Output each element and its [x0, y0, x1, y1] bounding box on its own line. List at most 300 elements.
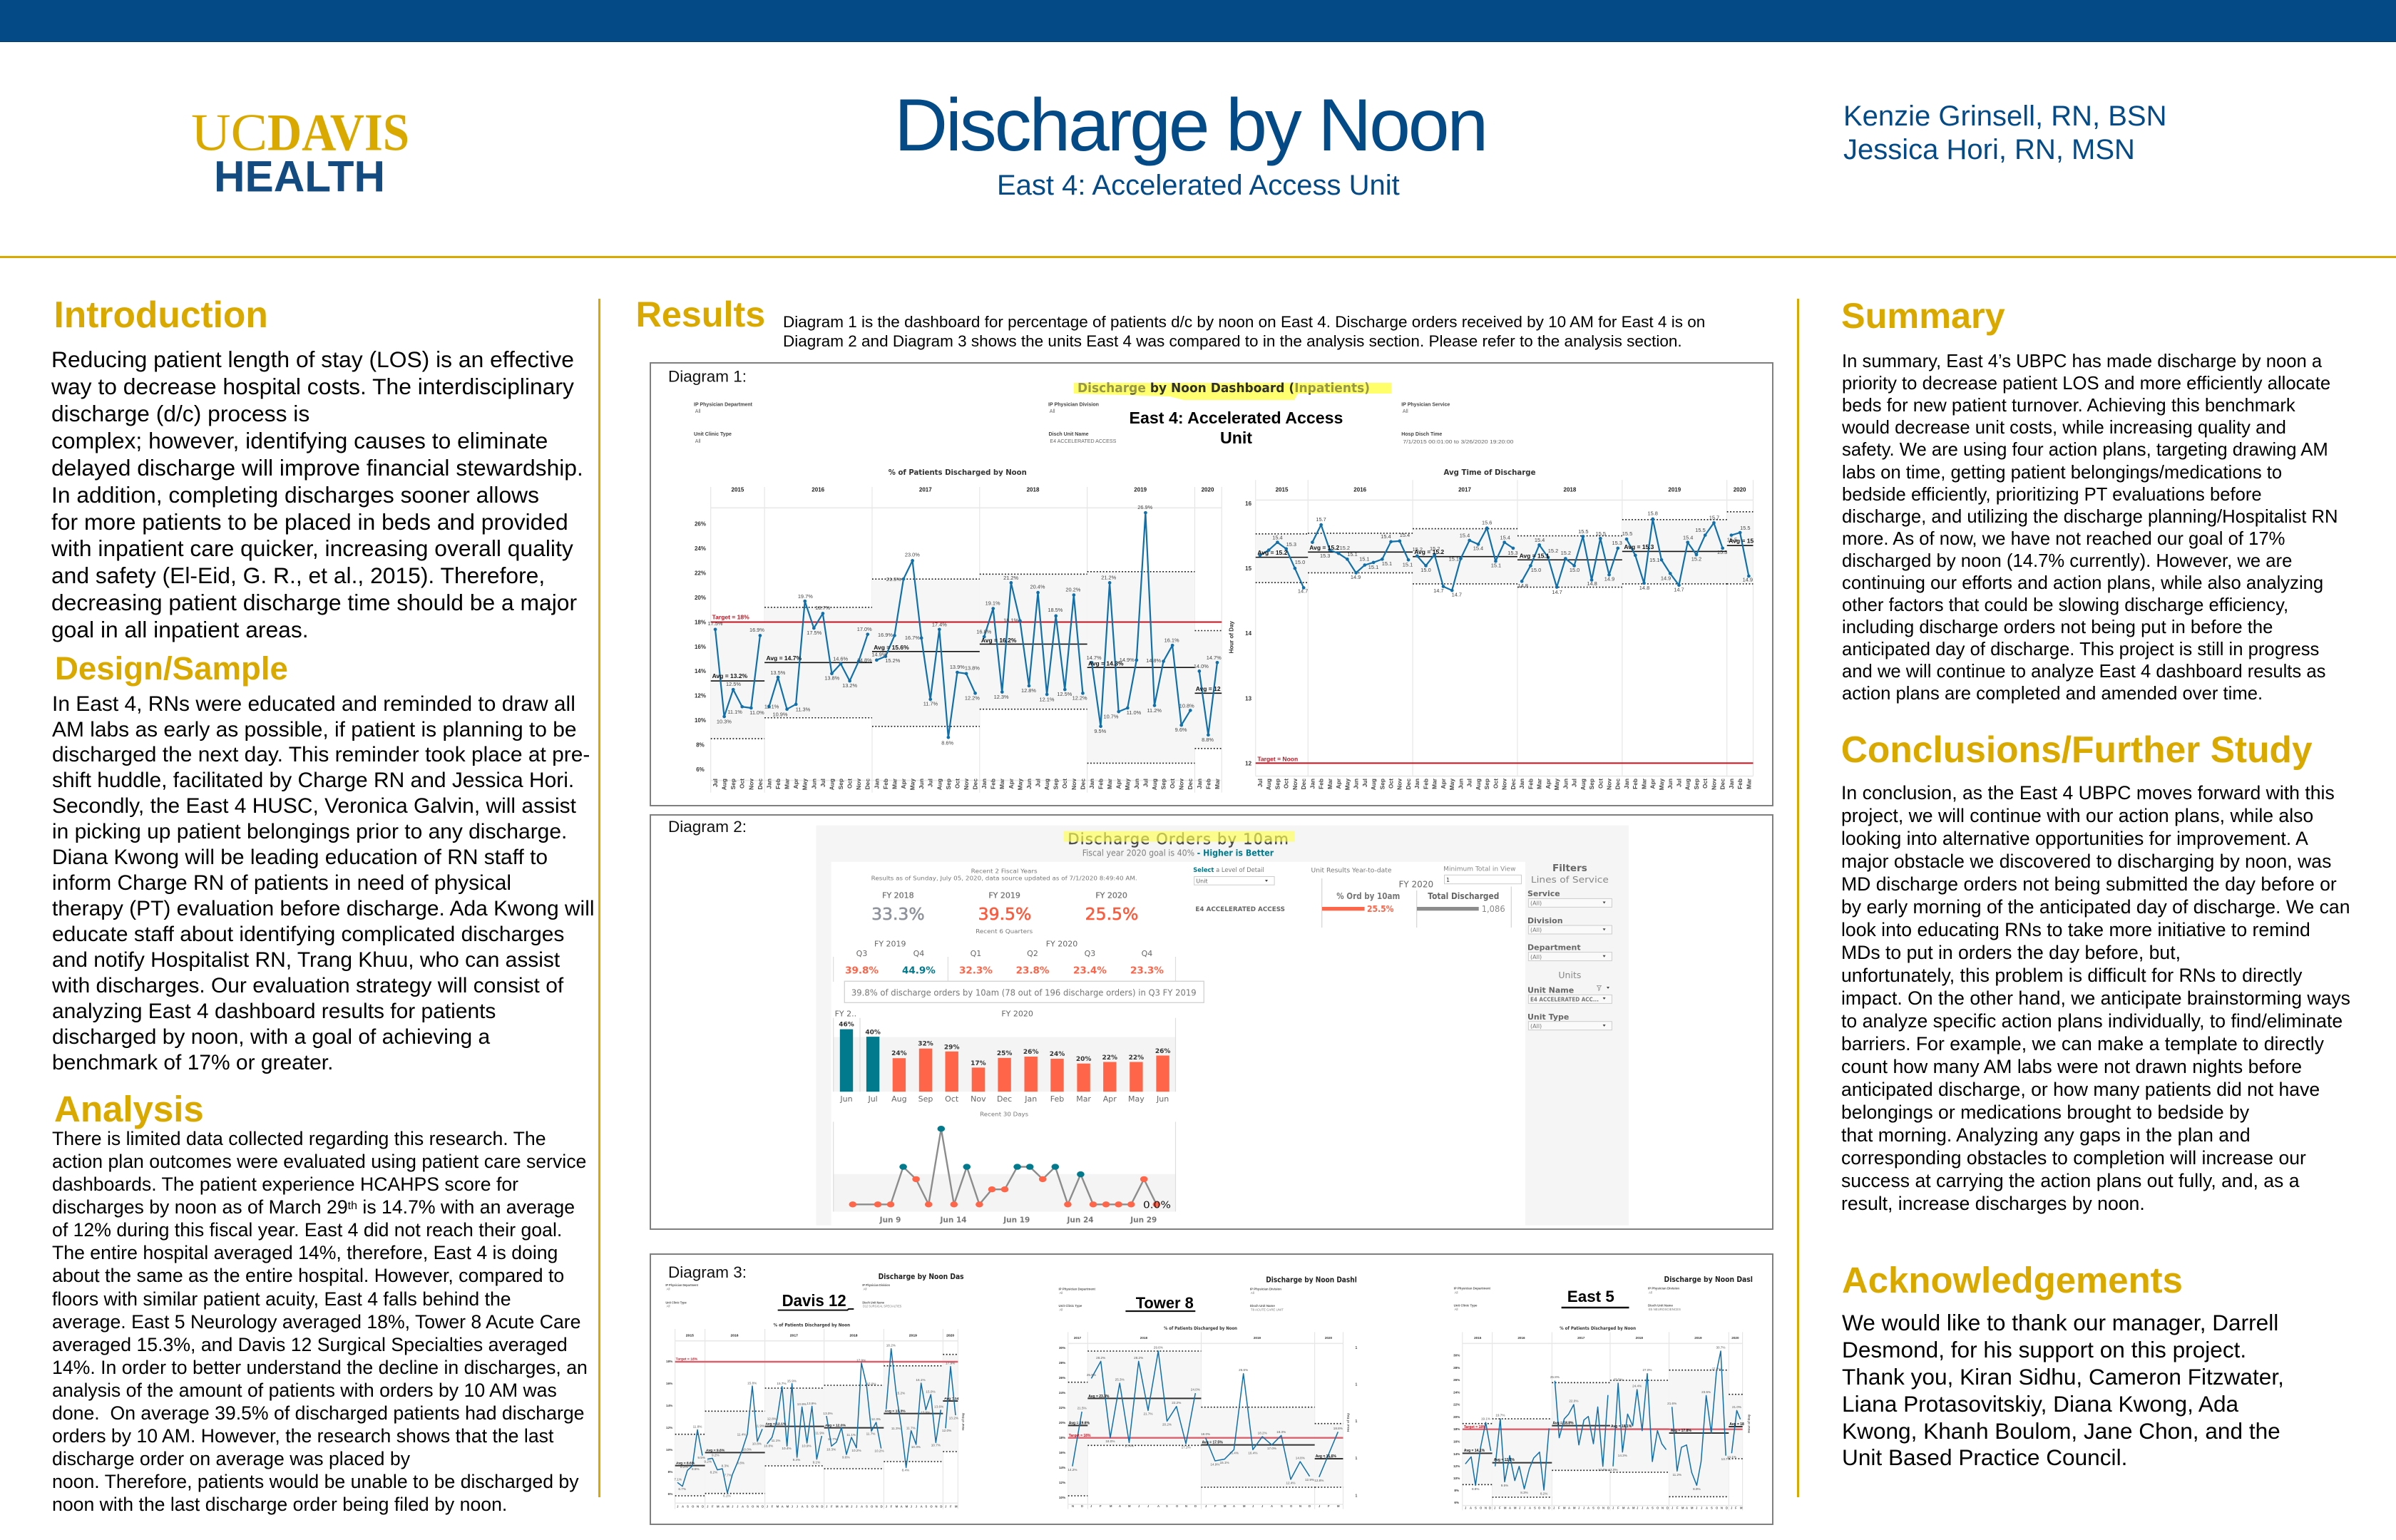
recent fiscal years header: Results as of Sunday, July 05, 2020, data source updated as of 7/1/2020 8:49:40 AM. [871, 875, 1137, 881]
data labels: 21.5% [1077, 1406, 1087, 1410]
data labels: 10.3% [911, 1445, 921, 1449]
monthly bar chart: Mar [1076, 1094, 1091, 1104]
month axis: Sep [1053, 779, 1060, 789]
month axis: Mar [1640, 778, 1647, 789]
text: analysis: of 12% during this fiscal year. East 4 did not reach their goal. [52, 1219, 562, 1241]
plot marks [1068, 1332, 1343, 1509]
year headers: 2019 [1254, 1336, 1261, 1340]
data labels: 15.2 [1430, 545, 1440, 552]
month axis: Oct [1597, 779, 1604, 789]
y axis labels: 20% [1059, 1421, 1065, 1424]
recent 30 days line chart: Jun 29 [1130, 1216, 1157, 1225]
data labels: 12.8% [1021, 687, 1036, 694]
filters sidebar: Unit Name [1527, 985, 1574, 995]
data labels: 12.5% [726, 681, 741, 687]
text: design and sample: educate staff about identifying complicated discharges [52, 923, 564, 946]
month axis: Dec [1719, 779, 1726, 789]
y axis labels [1453, 1353, 1460, 1504]
average labels: Avg = 15.3 [1624, 543, 1654, 550]
unit results year-to-date: FY 2020 [1399, 880, 1433, 890]
data labels: 15.7 [1316, 516, 1326, 523]
right axis title: Hour of Day [1346, 1413, 1350, 1432]
text: design and sample [52, 692, 595, 1074]
month axis: Oct [1701, 779, 1709, 789]
plot marks [675, 1329, 958, 1509]
monthly bar chart: 24% [1050, 1051, 1065, 1058]
data labels: 15.4 [1473, 545, 1483, 552]
y axis labels [666, 1360, 673, 1496]
y axis labels: 6% [668, 1492, 673, 1496]
y axis labels: 26% [1059, 1376, 1065, 1380]
average labels: Avg = 13.2% [712, 672, 748, 679]
y axis labels [695, 520, 706, 773]
text: analysis: action plan outcomes were evaluated using patient care service [52, 1151, 586, 1172]
unit name: East 5: East 5 [1567, 1288, 1614, 1305]
data labels: 18.8% [1333, 1427, 1343, 1430]
month axis: May [1124, 779, 1131, 790]
month axis: Sep [1378, 779, 1386, 789]
filter values: All [1251, 1291, 1254, 1295]
subtitle: East 4: Accelerated Access Unit [997, 170, 1400, 201]
month axis: Aug [1043, 779, 1050, 790]
month axis: Jun [1133, 779, 1140, 789]
data labels: 8.2% [680, 1465, 688, 1469]
year headers: 2019 [1134, 486, 1147, 493]
month axis: Jul [1675, 779, 1682, 787]
year headers: 2017 [919, 486, 932, 493]
plot marks [1256, 480, 1753, 776]
data labels: 12.8% [767, 1417, 777, 1421]
month axis: Dec [1300, 779, 1307, 789]
year headers: 2015 [1276, 486, 1289, 493]
monthly bar chart: Apr [1103, 1094, 1117, 1104]
monthly bar chart: Aug [891, 1094, 907, 1104]
month axis: Jan [1413, 779, 1420, 789]
year headers [686, 1333, 954, 1338]
data labels: 29.6% [1154, 1346, 1163, 1349]
filters: IP Physician Division [1048, 402, 1099, 408]
data labels: 15.1 [1491, 563, 1501, 569]
average labels: Avg = 15.2 [1257, 549, 1288, 556]
data labels: 17.5% [708, 620, 723, 627]
year headers [1276, 486, 1746, 493]
y axis labels: 18% [695, 619, 706, 626]
year headers: 2015 [1474, 1336, 1482, 1340]
average labels: Avg = 13.3% [885, 1410, 906, 1414]
year headers: 2020 [1202, 486, 1214, 493]
heading: Design/Sample: Design/Sample [55, 650, 288, 687]
recent fiscal years header: Recent 2 Fiscal Years [971, 868, 1038, 874]
filters: Disch Unit Name [1648, 1303, 1673, 1308]
recent quarters: Q1 [971, 949, 981, 958]
data labels: 11.9% [815, 1432, 824, 1435]
fiscal year KPIs: FY 2019 [988, 891, 1020, 900]
dashboard white area [831, 862, 1525, 1226]
month axis: Aug [1580, 779, 1587, 790]
data labels: 22.2% [1172, 1401, 1181, 1405]
year headers [732, 486, 1214, 493]
year headers: 2016 [1517, 1336, 1525, 1340]
recent 30 days line chart: Jun 9 [879, 1216, 901, 1225]
month axis: Mar [998, 778, 1005, 789]
text: design and sample: shift huddle, facilitated by Charge RN and Jessica Hori. [52, 769, 574, 792]
data labels: 30.7% [1716, 1346, 1726, 1349]
data labels: 11.7% [923, 700, 938, 707]
year headers: 2017 [1458, 486, 1471, 493]
column divider right [1797, 299, 1799, 1497]
data labels: 15.1 [1403, 561, 1413, 568]
monthly bar chart: Dec [997, 1094, 1012, 1104]
text: results intro [783, 313, 1705, 350]
fiscal year KPIs: FY 2020 [1095, 891, 1127, 900]
data labels: 12.0% [942, 1429, 951, 1432]
monthly bar chart: Jun [839, 1094, 853, 1104]
year headers: 2016 [1353, 486, 1367, 493]
data labels: 14.9% [871, 652, 887, 657]
text: acknowledgements: Liana Protasovitskiy, Diana Kwong, Ada [1842, 1391, 2238, 1417]
data labels: 15.4 [1381, 533, 1391, 540]
data labels: 23.5% [1701, 1390, 1711, 1394]
text: analysis: orders by 10 AM. However, the research shows that the last [52, 1425, 553, 1447]
average labels: Avg = 8.6% [676, 1462, 695, 1466]
data labels: 15.1% [1220, 1461, 1229, 1464]
month axis [712, 778, 1221, 790]
data labels: 10.8% [1179, 703, 1194, 709]
text: conclusions: count how many AM labs were not drawn nights before [1841, 1055, 2302, 1077]
data labels: 11.7% [906, 1427, 916, 1430]
data labels: 10.7% [828, 1437, 837, 1441]
month axis: Nov [1606, 779, 1613, 790]
average labels: Avg = 15.6% [874, 644, 909, 651]
month axis: Feb [1527, 779, 1534, 789]
data labels: 12.0% [1608, 1468, 1618, 1472]
text: summary: In summary, East 4’s UBPC has made discharge by noon a [1842, 351, 2322, 371]
right axis ticks: 1 [1355, 1346, 1358, 1350]
monthly bar chart: 22% [1102, 1054, 1117, 1062]
month axis: Apr [1335, 778, 1342, 789]
data labels: 16.4% [1248, 1452, 1257, 1455]
y axis labels: 6% [1454, 1501, 1459, 1504]
chart: Tower 8 [1058, 1275, 1358, 1509]
average labels: Avg = 15.2 [1309, 544, 1340, 551]
y axis labels: 26% [695, 520, 706, 528]
data labels: 15.1 [1347, 551, 1358, 558]
text: conclusions: MD discharge orders not being submitted the day before or [1841, 873, 2337, 894]
data labels: 9.5% [697, 1456, 705, 1459]
data labels: 10.9% [773, 712, 788, 717]
data labels [1472, 1346, 1741, 1496]
data labels: 11.1% [846, 1433, 856, 1437]
data labels: 21.0% [1732, 1405, 1741, 1409]
text: conclusions: to analyze specific action plans individually, to find/eliminate [1841, 1010, 2343, 1031]
year headers: 2018 [1564, 486, 1577, 493]
text: introduction: with inpatient care quicker, increasing overall quality [51, 535, 573, 561]
data labels: 15.9% [866, 1382, 876, 1386]
data labels: 10.8% [752, 1442, 762, 1445]
average labels: Avg = 9.8% [706, 1448, 725, 1452]
level of detail selector: Unit [1196, 878, 1208, 884]
data labels: 12.3% [994, 694, 1009, 700]
year headers: 2016 [730, 1333, 739, 1338]
month axis: Oct [1169, 779, 1176, 789]
y axis labels: 20% [695, 595, 706, 601]
data labels: 17.0% [857, 626, 872, 632]
data labels: 12.1% [1040, 697, 1055, 703]
month axis: Jan [981, 779, 988, 789]
month axis: Jul [712, 779, 719, 787]
text: summary: would decrease unit costs, while increasing quality and [1842, 418, 2286, 438]
month axis: Aug [936, 779, 943, 790]
filters sidebar: (All) [1530, 900, 1542, 907]
text: analysis: discharges by noon as of March 29th is 14.7% with an average [52, 1196, 575, 1218]
filters: Unit Clinic Type [665, 1300, 687, 1304]
heading: Acknowledgements: Acknowledgements [1842, 1260, 2183, 1300]
panel: diagram 1 [650, 363, 1773, 806]
data labels: 14.9 [1604, 575, 1614, 582]
y axis labels: 14% [1059, 1466, 1065, 1469]
text: summary: priority to decrease patient LOS and more efficiently allocate [1842, 374, 2330, 394]
data labels: 10.9% [802, 1444, 812, 1447]
data labels: 15.5 [1695, 527, 1706, 533]
y axis labels: 15 [1245, 565, 1252, 572]
monthly bar chart: Jan [1024, 1094, 1037, 1104]
monthly bar chart: 25% [997, 1050, 1012, 1057]
recent quarters: FY 2020 [1046, 940, 1077, 949]
filter values: All [1050, 409, 1055, 414]
text: analysis: discharge order on average was placed by [52, 1448, 410, 1469]
text: design and sample: analyzing East 4 dashboard results for patients [52, 1000, 496, 1023]
data labels: 16.9% [749, 627, 764, 633]
month axis: Jan [873, 779, 880, 789]
unit results year-to-date: 1,086 [1482, 903, 1505, 914]
data labels: 8.6% [941, 740, 954, 746]
month axis: Jul [1361, 779, 1368, 787]
data labels: 28.2% [1134, 1356, 1143, 1360]
unit name: Davis 12: Davis 12 [782, 1291, 846, 1310]
fiscal year KPIs: FY 2018 [882, 891, 914, 900]
month axis [1256, 778, 1752, 790]
data labels [1272, 510, 1753, 597]
filters: Unit Clinic Type [694, 432, 732, 437]
text: introduction: discharge (d/c) process is [51, 401, 309, 426]
text: summary: anticipated day of discharge. This project is still in progress [1842, 640, 2319, 659]
text: introduction: decreasing patient discharge time should be a major [51, 590, 577, 615]
data labels: 14.0% [1194, 663, 1209, 669]
data labels: 15.2 [1691, 555, 1701, 562]
data labels: 11.2% [1672, 1473, 1681, 1477]
data labels: 13.5% [770, 669, 786, 676]
y axis labels: 18% [666, 1360, 673, 1363]
dashboard title highlighted: Discharge Orders by 10am [1068, 831, 1289, 848]
text: conclusions: looking into alternative opportunities for improvement. A [1841, 827, 2308, 848]
data labels: 13.2% [949, 1416, 958, 1420]
text: analysis: The entire hospital averaged 14%, therefore, East 4 is doing [52, 1242, 558, 1263]
data labels: 15.4 [1683, 535, 1693, 540]
filter values [1455, 1290, 1681, 1311]
filter values: All [1455, 1308, 1458, 1311]
text: analysis: noon. Therefore, patients would be unable to be discharged by [52, 1471, 579, 1492]
month axis: Jul [1034, 779, 1041, 787]
filter values: All [1455, 1290, 1458, 1295]
y axis labels: 16% [695, 644, 706, 650]
text: conclusions: result, increase discharges by noon. [1841, 1192, 2145, 1213]
text: analysis [52, 1128, 588, 1515]
text: analysis: 14%. In order to better understand the decline in discharges, an [52, 1357, 588, 1378]
text: design and sample: with discharges. Our evaluation strategy will consist of [52, 974, 563, 997]
heading: Conclusions/Further Study: Conclusions/Further Study [1841, 729, 2313, 770]
y axis labels: 16% [1453, 1440, 1460, 1443]
y axis labels: 10% [695, 717, 706, 724]
year headers: 2019 [909, 1333, 917, 1338]
data labels: 10.2% [851, 1449, 861, 1452]
data labels: 14.8 [1639, 585, 1649, 591]
chart title: % of Patients Discharged by Noon [889, 468, 1027, 477]
y axis labels [1245, 500, 1252, 767]
header rule [0, 255, 2396, 258]
target label: Target = 18% [676, 1357, 698, 1362]
text: conclusions: by early morning of the anticipated day of discharge. We can [1841, 895, 2350, 917]
average labels: Avg = 14.1% [1464, 1449, 1485, 1453]
average labels: Avg = 15.6% [1316, 1454, 1336, 1459]
y axis labels: 12% [1059, 1481, 1065, 1484]
text: introduction [51, 346, 583, 642]
data labels: 21.7% [1143, 1412, 1153, 1416]
data labels: 25.3% [1115, 1377, 1125, 1382]
month axis: Mar [1536, 778, 1543, 789]
month axis: Oct [1388, 779, 1395, 789]
average labels: Avg = 12.0% [825, 1424, 846, 1428]
fiscal year KPIs: 25.5% [1085, 904, 1138, 924]
text: conclusions: MDs to put in orders the day before, but, [1841, 941, 2181, 962]
unit results year-to-date: 1 [1446, 877, 1450, 883]
heading: Introduction: Introduction [54, 294, 268, 335]
data labels: 17.9% [856, 1358, 866, 1362]
filters sidebar: E4 ACCELERATED ACC... [1530, 997, 1599, 1002]
text: conclusions [1841, 781, 2350, 1213]
target label: Target = Noon [1257, 756, 1298, 763]
data labels [1068, 1346, 1343, 1484]
data labels: 18.1% [1003, 617, 1018, 623]
month axis: Feb [1318, 779, 1325, 789]
month axis: Jan [1623, 779, 1630, 789]
text: introduction: complex; however, identifying causes to eliminate [51, 428, 548, 453]
data labels: 12.5% [1057, 691, 1072, 697]
data labels: 17.5% [807, 630, 822, 636]
heading: Analysis: Analysis [54, 1089, 204, 1129]
data labels: 11.0% [1127, 709, 1142, 716]
filters sidebar: Units [1558, 970, 1581, 980]
month axis: Jan [1518, 779, 1525, 789]
y axis labels: 18% [1059, 1436, 1065, 1439]
y axis labels: 30% [1453, 1353, 1460, 1357]
data labels: 8.9% [1472, 1487, 1479, 1491]
year headers: 2020 [1325, 1336, 1333, 1340]
filters [1454, 1286, 1679, 1308]
data labels: 14.8% [1296, 1456, 1305, 1460]
text: analysis: average. East 5 Neurology averaged 18%, Tower 8 Acute Care [52, 1311, 580, 1333]
text: conclusions: barriers. For example, we can make a template to directly [1841, 1032, 2324, 1054]
month axis: Aug [1475, 779, 1482, 790]
text: summary: bedside efficiently, prioritizing PT evaluations before [1842, 485, 2262, 505]
y axis labels [1059, 1346, 1065, 1499]
chart: East 5: % of Patients Discharged by Noon [1560, 1326, 1636, 1331]
text: conclusions: corresponding obstacles to completion will increase our [1841, 1146, 2306, 1168]
average labels: Avg = 17.8% [1671, 1429, 1691, 1433]
recent quarters: 23.4% [1073, 965, 1107, 977]
right axis ticks: 1 [1355, 1494, 1358, 1499]
average labels: Avg = 15.1 [1520, 552, 1550, 559]
text: acknowledgements: Thank you, Kiran Sidhu, Cameron Fitzwater, [1842, 1364, 2284, 1390]
data labels: 14.8% [857, 657, 872, 664]
data labels: 14.7 [1674, 586, 1684, 593]
text: introduction: In addition, completing discharges sooner allows [51, 482, 539, 508]
data labels: 17.4% [932, 622, 947, 627]
data labels: 10.4% [782, 1447, 792, 1450]
monthly bar chart: FY 2020 [1001, 1009, 1033, 1018]
data labels: 15.5 [1740, 525, 1750, 531]
chart: Davis 12 [665, 1272, 965, 1509]
monthly bar chart: 46% [839, 1022, 854, 1029]
month axis: Mar [1326, 778, 1333, 789]
text: conclusions: that morning. Analyzing any gaps in the plan and [1841, 1124, 2251, 1145]
y axis labels: 14% [695, 668, 706, 674]
recent quarters: Q3 [1085, 949, 1095, 958]
text: analysis: There is limited data collected regarding this research. The [52, 1128, 546, 1149]
month axis: Aug [1151, 779, 1158, 790]
recent 30 days line chart: Jun 14 [939, 1216, 967, 1225]
average labels: Avg = 14.7% [766, 654, 802, 662]
y axis labels: 6% [696, 766, 705, 773]
month axis: Dec [757, 779, 764, 789]
unit results year-to-date: Unit Results Year-to-date [1311, 867, 1392, 874]
month axis: Feb [774, 779, 782, 789]
data labels: 27.2% [1711, 1367, 1721, 1370]
average labels: Avg = 14 [944, 1397, 959, 1401]
data labels: 14.7 [1552, 589, 1562, 595]
y axis labels: 12% [695, 693, 706, 699]
text: analysis: averaged 15.3%, and Davis 12 Surgical Specialties averaged [52, 1334, 568, 1355]
year headers: 2018 [849, 1333, 858, 1338]
month axis: Jul [927, 779, 934, 787]
level of detail selector: Select a Level of Detail [1193, 867, 1264, 874]
monthly bar chart: Oct [945, 1094, 959, 1104]
data labels: 15.2 [1561, 550, 1571, 556]
chart: Davis 12: Discharge by Noon Das [879, 1272, 964, 1281]
text: acknowledgements: Kwong, Khanh Boulom, Jane Chon, and the [1842, 1418, 2280, 1444]
data labels: 8.5% [692, 1467, 700, 1471]
filters sidebar [1527, 863, 1612, 1030]
filters [665, 1283, 890, 1304]
average labels: Avg = 18.8% [1552, 1422, 1574, 1426]
text: conclusions: look into educating RNs to take more initiative to remind [1841, 918, 2310, 940]
average labels [1464, 1422, 1744, 1462]
text: acknowledgements: Desmond, for his support on this project. [1842, 1337, 2246, 1362]
monthly bar chart: 26% [1155, 1048, 1170, 1055]
year headers: 2018 [1636, 1336, 1643, 1340]
data labels: 15.1 [1382, 560, 1392, 567]
data labels: 27.0% [1642, 1368, 1652, 1372]
text: design and sample: discharged by noon, with a goal of achieving a [52, 1025, 490, 1049]
fiscal year KPIs [871, 891, 1138, 924]
dashboard background [816, 826, 1629, 1226]
monthly bar chart: 40% [865, 1030, 881, 1037]
y axis labels: 12% [666, 1426, 673, 1429]
month axis: Jun [1667, 779, 1674, 789]
data labels: 12.2% [965, 695, 980, 702]
month axis: May [1448, 779, 1455, 790]
year headers: 2020 [946, 1333, 954, 1338]
text: design and sample: inform Charge RN of patients in need of physical [52, 871, 511, 895]
